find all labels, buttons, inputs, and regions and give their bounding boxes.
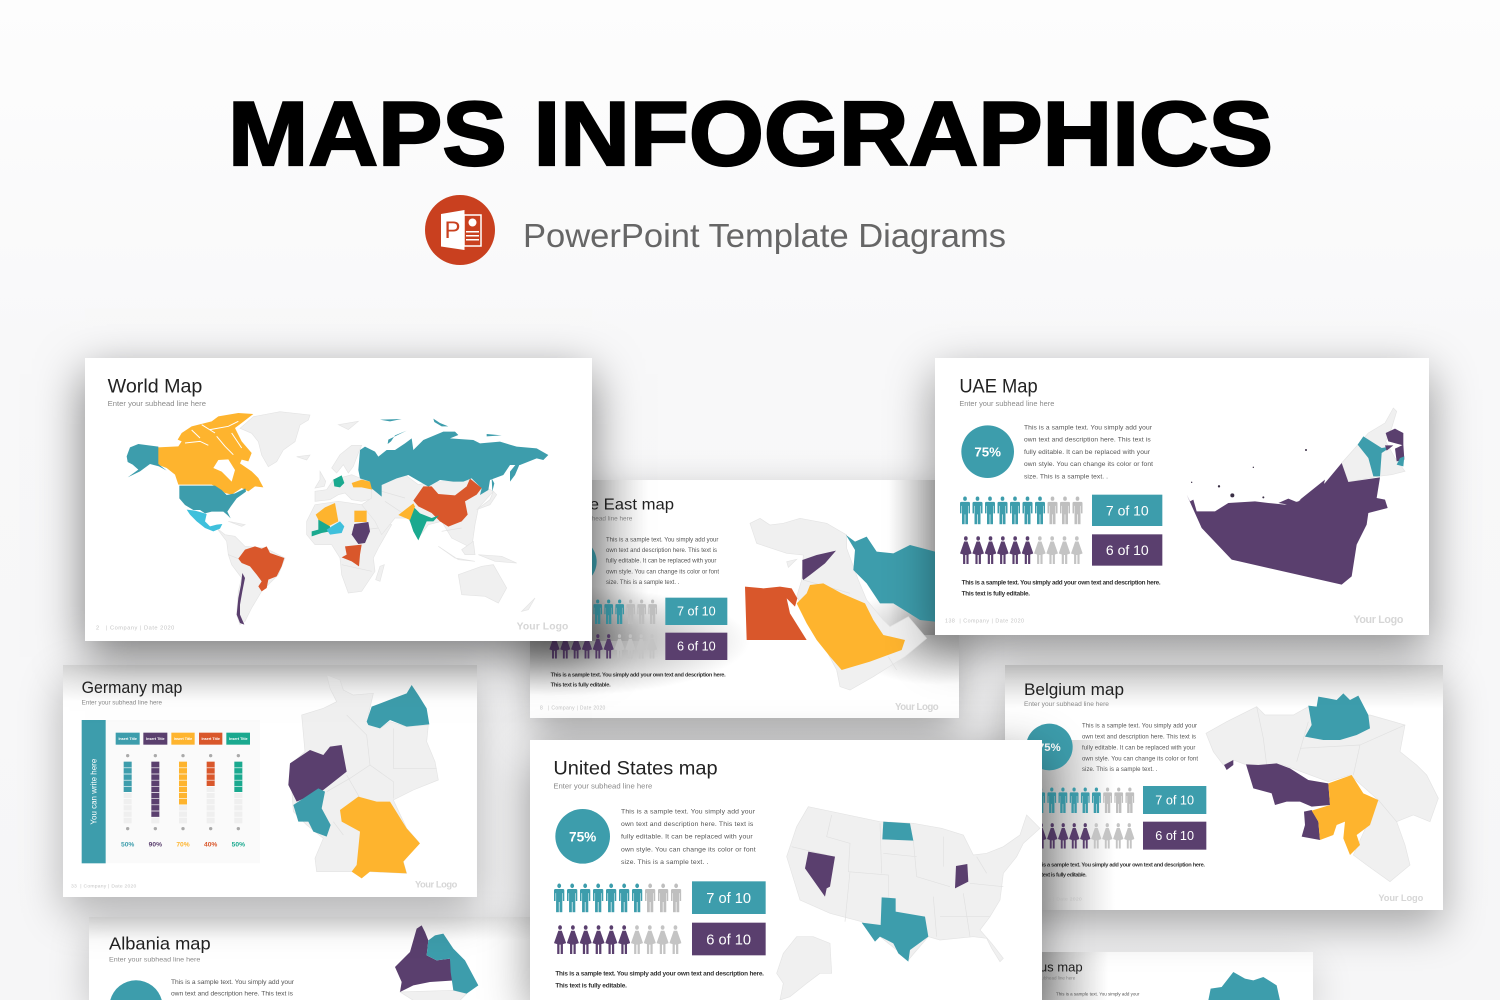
bar chart: filled segments (124, 762, 242, 817)
text block: own text and description here. This text is (171, 990, 294, 997)
side label (82, 720, 106, 863)
icon: PowerPoint logo (425, 195, 495, 265)
people row: men (554, 884, 681, 912)
column headers: Insert Title (174, 737, 192, 741)
stat box: 7 of 10 (692, 881, 766, 914)
panel: Belarus map (1000, 952, 1313, 1000)
panel: Middle East map (530, 480, 959, 718)
panel: United States map (530, 740, 1042, 1000)
stat box: 7 of 10: 7 of 10 (677, 605, 716, 619)
percent labels: 50% (121, 841, 134, 848)
bold note: This text is fully editable. (1030, 873, 1087, 879)
map: world base (217, 412, 535, 625)
logo text: Your Logo (895, 702, 939, 713)
bold note: This is a sample text. You simply add your own text and description here. (962, 580, 1161, 587)
bold note: This text is fully editable. (962, 591, 1030, 598)
footer: | Company | Date 2020 (1025, 897, 1082, 903)
text block: fully editable. It can be replaced with your (621, 834, 753, 841)
footer: 138 | Company | Date 2020 (945, 618, 1024, 624)
stat circle: 75% (1038, 742, 1061, 754)
text block: own style. You can change its color or font (1082, 756, 1198, 762)
text block: This is a sample text. You simply add your (621, 808, 756, 815)
text block: This is a sample text. You simply add your (606, 537, 718, 543)
column headers: Insert Title (229, 737, 248, 741)
text block (1082, 724, 1198, 773)
panel: Belgium map (1005, 665, 1443, 910)
stat circle (110, 980, 162, 1000)
heading: Belarus map: Belarus map (1009, 960, 1083, 974)
stat box: 7 of 10: 7 of 10 (1106, 502, 1149, 518)
bold note: This text is fully editable. (555, 982, 627, 989)
bold note: This is a sample text. You simply add your own text and description here. (551, 673, 726, 679)
text block (606, 537, 719, 586)
map: United States (777, 807, 1040, 1000)
map: UAE (1187, 408, 1405, 585)
footer: 33 | Company | Date 2020 (71, 883, 137, 889)
map: Africa (312, 503, 370, 566)
percent labels: 50% (232, 841, 245, 848)
heading: Belgium map (1024, 680, 1124, 699)
text block: own text and description here. This text is (1024, 437, 1151, 444)
subhead: Enter your subhead line here (82, 699, 162, 706)
bold note: This is a sample text. You simply add your own text and description here. (555, 970, 764, 977)
people row: women (960, 536, 1083, 564)
stat box: 6 of 10: 6 of 10 (677, 640, 716, 654)
heading: Albania map (109, 933, 211, 953)
map: Germany (288, 675, 438, 878)
map: Belgium (1206, 693, 1438, 882)
text block: size. This is a sample text. . (606, 580, 680, 586)
side label: You can write here (90, 758, 99, 825)
footer: 8 | Company | Date 2020 (540, 705, 606, 711)
people row: women (554, 925, 682, 954)
map: North America (127, 413, 263, 531)
text block: fully editable. It can be replaced with your (1082, 745, 1195, 751)
stat box: 7 of 10: 7 of 10 (706, 891, 751, 907)
bold note (962, 580, 1161, 598)
subhead: Enter your subhead line here (550, 515, 633, 522)
stat circle: 75% (569, 830, 596, 845)
text block: size. This is a sample text. . (1082, 767, 1158, 773)
text block: This is a sample text. You simply add your (1056, 991, 1140, 996)
footer: 2 | Company | Date 2020 (96, 626, 174, 632)
text block: own style. You can change its color or font (606, 569, 719, 575)
text block: This is a sample text. You simply add your (171, 979, 295, 986)
subhead: Enter your subhead line here (108, 399, 206, 408)
people row: men (960, 497, 1082, 524)
stat circle (550, 538, 597, 585)
stat circle (1026, 724, 1073, 770)
text block: size. This is a sample text. . (621, 859, 708, 866)
subtitle: PowerPoint Template Diagrams (523, 217, 1006, 254)
text block: own style. You can change its color or font (621, 846, 756, 853)
stat box: 7 of 10: 7 of 10 (1155, 793, 1194, 807)
stat box: 6 of 10 (1092, 534, 1162, 566)
text block: own text and description here. This text is (621, 821, 754, 828)
map shape (1208, 972, 1280, 1000)
stat box: 7 of 10 (1143, 786, 1206, 814)
stat box: 7 of 10 (665, 598, 727, 625)
subhead: Enter your subhead line here (553, 782, 652, 791)
percent labels: 70% (176, 841, 190, 848)
text block: fully editable. It can be replaced with your (1024, 449, 1151, 456)
logo text: Your Logo (415, 880, 458, 890)
panel: World Map (85, 358, 592, 641)
people row: women (1025, 823, 1134, 849)
stat box: 6 of 10: 6 of 10 (706, 932, 751, 948)
column headers: Insert Title (146, 737, 165, 741)
text block: This is a sample text. You simply add your (1024, 425, 1153, 432)
percent labels (121, 841, 245, 848)
map: South America (237, 546, 284, 625)
stat circle: 75% (974, 445, 1001, 460)
panel: Germany map (63, 665, 477, 897)
column headers: Insert Title (118, 737, 137, 741)
heading: UAE Map (959, 377, 1038, 398)
heading: World Map (108, 376, 202, 397)
chart panel background (106, 720, 260, 863)
people row: men (1025, 788, 1134, 813)
logo text: Your Logo (1353, 614, 1404, 626)
icon: PowerPoint logo: P (444, 217, 461, 244)
text block (1024, 425, 1153, 480)
map: Middle East (745, 518, 935, 690)
subhead: Enter your subhead line here (959, 399, 1054, 408)
stat circle (961, 425, 1014, 478)
heading: Germany map (82, 678, 182, 697)
bold note (1030, 863, 1205, 879)
subhead: Enter your subhead line here (1017, 975, 1076, 980)
text block: own style. You can change its color or font (1024, 461, 1153, 468)
stat box: 6 of 10 (665, 633, 727, 660)
logo text: Your Logo (517, 622, 568, 633)
percent labels: 90% (149, 841, 162, 848)
stat box: 7 of 10 (1092, 495, 1162, 526)
map: Europe and Asia (333, 419, 548, 540)
logo text: Your Logo (1378, 893, 1424, 903)
text block (171, 979, 295, 997)
percent labels: 40% (204, 841, 217, 848)
text block: own text and description here. This text is (1082, 734, 1196, 740)
bold note (555, 970, 764, 989)
heading: Middle East map (550, 496, 674, 513)
people row: men (549, 600, 657, 624)
text block (621, 808, 756, 866)
stat box: 6 of 10 (1143, 822, 1206, 850)
bar end dots (126, 754, 240, 830)
map: Albania (395, 925, 478, 1000)
subhead: Enter your subhead line here (1024, 701, 1109, 708)
text block: size. This is a sample text. . (1024, 473, 1108, 480)
stat box: 6 of 10: 6 of 10 (1155, 829, 1194, 843)
bold note (551, 673, 726, 689)
heading: United States map (553, 759, 718, 780)
bold note: This text is fully editable. (551, 683, 611, 689)
bold note: This is a sample text. You simply add your own text and description here. (1030, 863, 1205, 869)
text block: fully editable. It can be replaced with your (606, 559, 716, 565)
stat circle (555, 809, 610, 864)
panel: UAE Map (935, 358, 1429, 635)
text block: This is a sample text. You simply add your (1082, 724, 1197, 730)
panel: Albania map (89, 917, 530, 1000)
bar chart: empty tracks (124, 762, 242, 823)
subhead: Enter your subhead line here (109, 956, 201, 963)
column headers (116, 733, 250, 745)
title: MAPS INFOGRAPHICS (228, 84, 1273, 185)
text block: own text and description here. This text is (606, 548, 717, 554)
stat box: 6 of 10 (692, 923, 766, 955)
stat box: 6 of 10: 6 of 10 (1106, 542, 1149, 558)
column headers: Insert Title (201, 737, 220, 741)
people row: women (549, 634, 657, 659)
